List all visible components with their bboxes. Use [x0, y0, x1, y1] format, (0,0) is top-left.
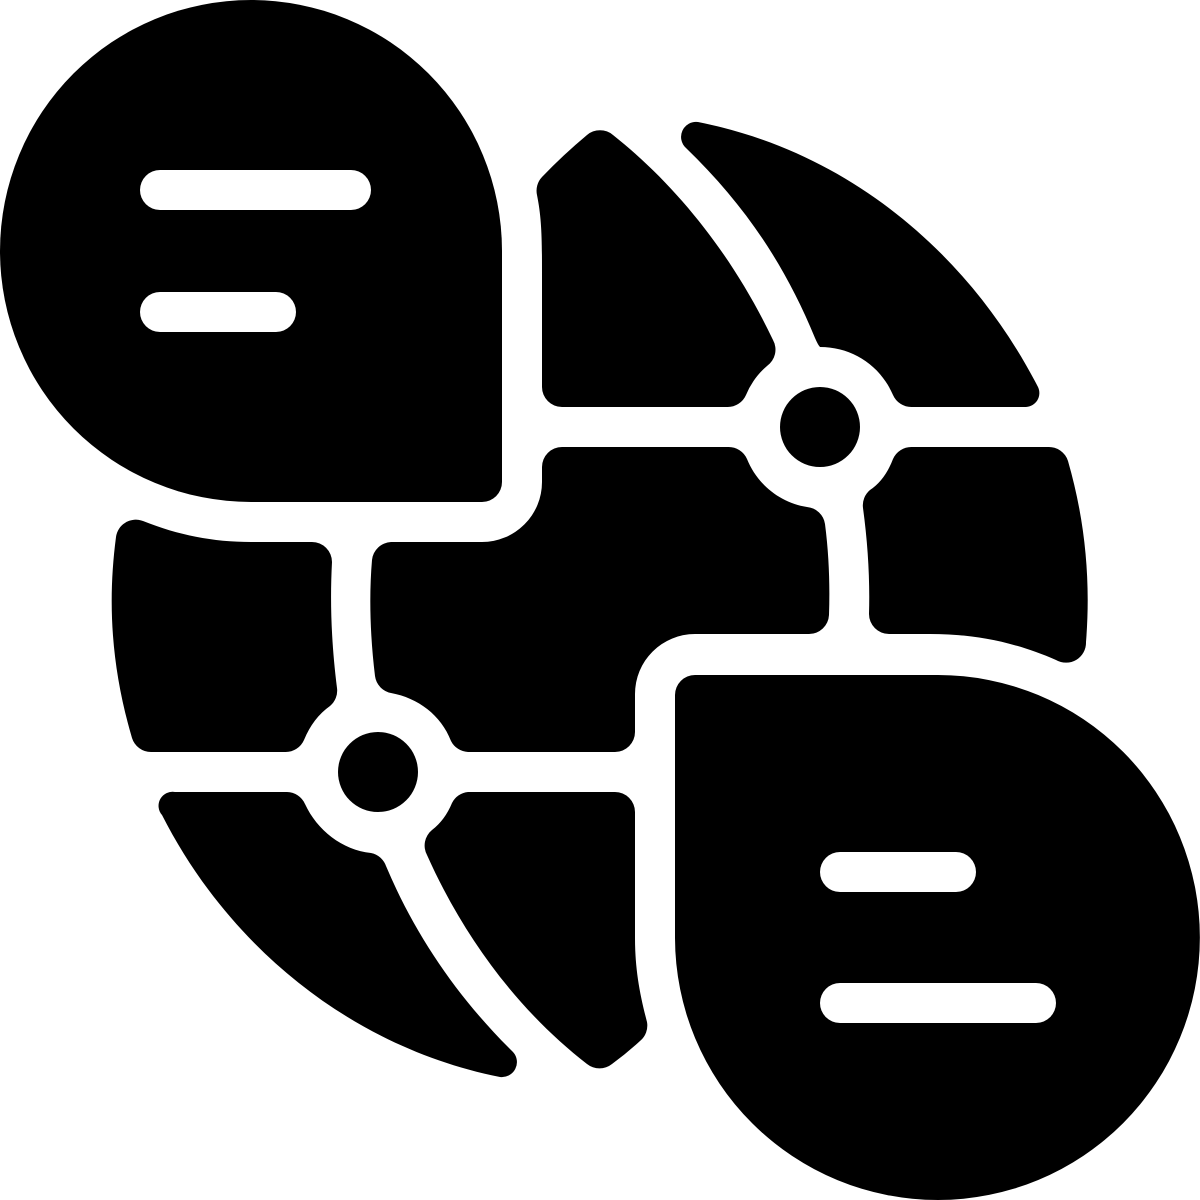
icon: upper network node: [780, 387, 860, 467]
globe segment: bottom left: [159, 792, 517, 1077]
globe segment: top right: [681, 122, 1039, 407]
globe segment: top middle: [537, 130, 775, 407]
globe segment: middle left: [112, 520, 337, 752]
globe segment: middle right: [863, 447, 1088, 663]
globe segment: bottom middle: [425, 792, 647, 1068]
icon: lower network node: [338, 732, 418, 812]
icon: globe: [112, 122, 1088, 1077]
globe segment: center: [370, 447, 829, 752]
icon: top-left speech bubble: [0, 0, 502, 502]
icon: bottom-right speech bubble: [675, 675, 1200, 1200]
